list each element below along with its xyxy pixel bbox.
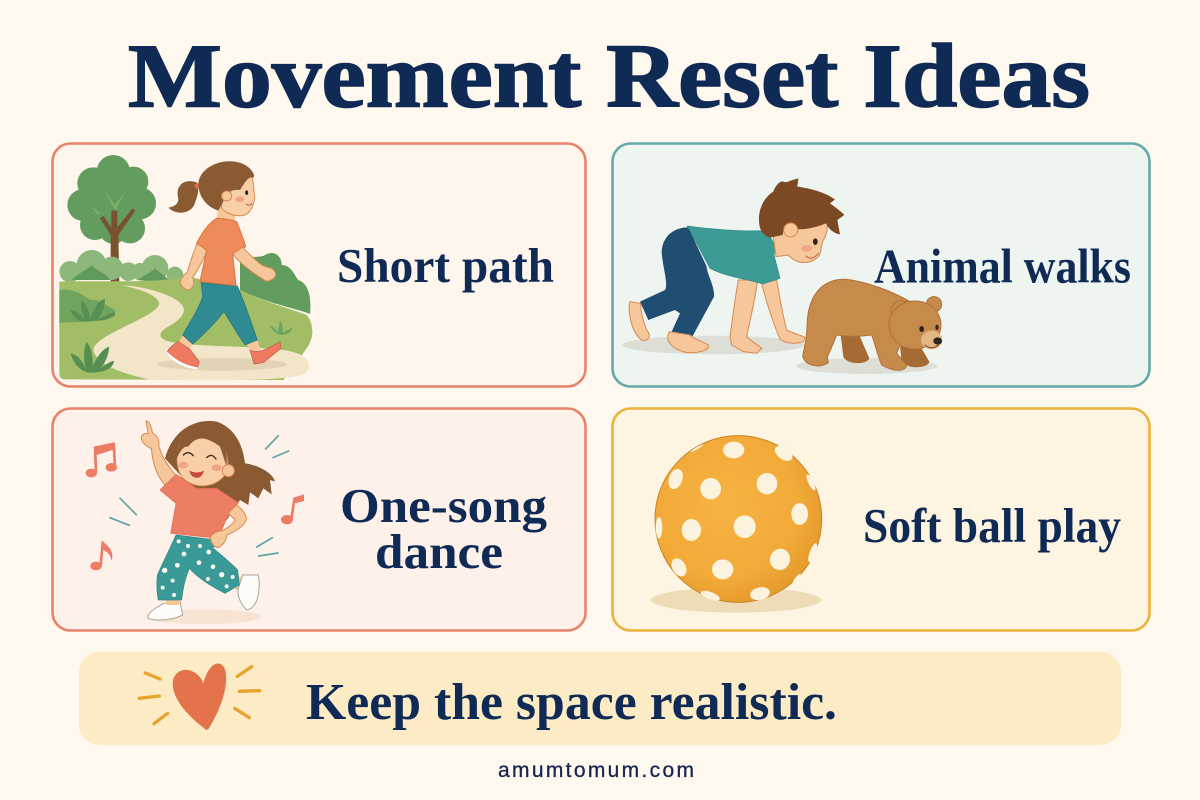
banner (79, 652, 1121, 745)
ankles (178, 335, 261, 353)
label: Animal walks (874, 238, 1131, 294)
face (220, 175, 255, 216)
illustration: boy crawling with bear (622, 178, 942, 374)
motion lines (110, 436, 289, 556)
label (340, 478, 548, 579)
back bushes (59, 250, 183, 283)
pants (157, 535, 239, 600)
title: Movement Reset Ideas (128, 26, 1090, 126)
pants (640, 227, 714, 336)
illustration: dancing girl (86, 421, 304, 624)
tree canopy (67, 155, 156, 244)
shadow (145, 609, 262, 624)
footer url: amumtomum.com (498, 759, 694, 782)
side arm and hand (211, 505, 247, 548)
front arm (233, 247, 276, 281)
rear leg (235, 577, 245, 590)
shadows (622, 336, 804, 354)
head (177, 438, 228, 486)
polka dots (161, 539, 235, 597)
shirt (197, 218, 246, 286)
music notes (86, 442, 304, 570)
back arm (180, 243, 207, 290)
label: dance (375, 524, 503, 579)
front arm (730, 280, 762, 353)
back arm (762, 280, 805, 343)
label: Short path (337, 238, 554, 293)
back foot (629, 302, 649, 341)
panel: one-song dance (52, 408, 586, 630)
label: Soft ball play (863, 498, 1121, 553)
footpath (93, 285, 309, 380)
shirt (687, 226, 780, 284)
front shoe and rear shoe (238, 575, 259, 610)
illustration: girl walking in park (59, 155, 312, 380)
front foot (668, 332, 709, 353)
raised arm (141, 421, 176, 485)
ponytail (168, 181, 198, 213)
shoes (167, 342, 199, 367)
panel: short path (52, 144, 586, 386)
banner text: Keep the space realistic. (306, 674, 837, 731)
face (183, 453, 216, 459)
pants (183, 283, 257, 345)
bear (803, 279, 942, 370)
fringe and ear (174, 430, 227, 467)
illustration: polka-dot ball (651, 436, 822, 613)
hair (759, 178, 844, 238)
hair back (165, 421, 275, 520)
ground (59, 277, 312, 380)
shadow (157, 358, 287, 371)
head (773, 220, 827, 263)
neck (217, 207, 237, 223)
foreground bushes (59, 290, 115, 323)
icon: heart with rays (139, 663, 260, 730)
hair (198, 161, 254, 211)
panel: soft ball play (612, 408, 1150, 630)
label: One-song (340, 478, 548, 533)
shirt (160, 474, 238, 538)
right bush (240, 253, 310, 314)
panel: animal walks (612, 144, 1150, 386)
